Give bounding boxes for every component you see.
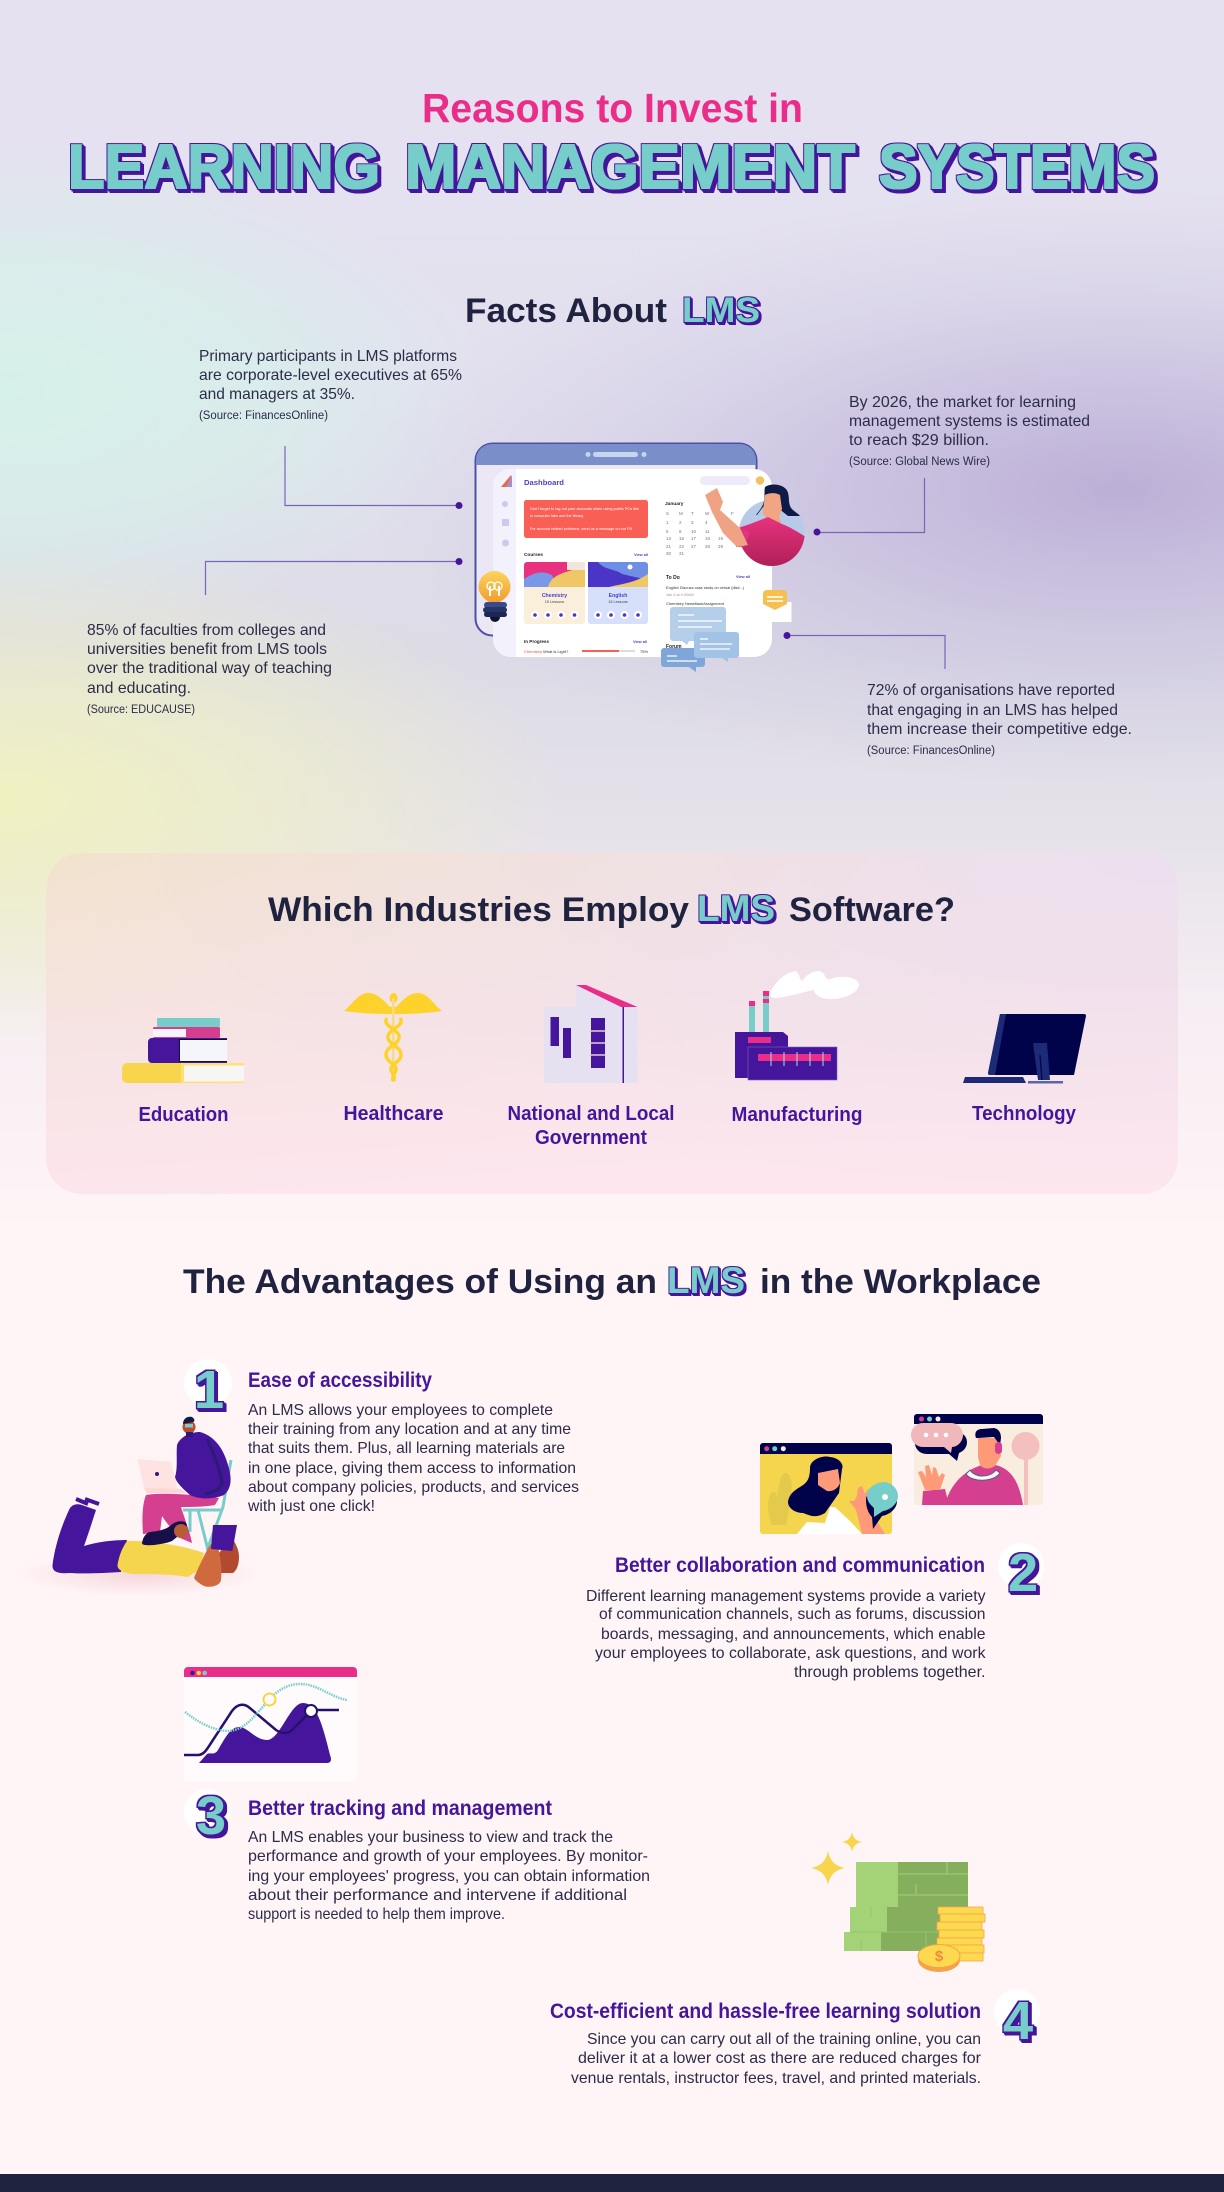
panel: industries xyxy=(46,853,1178,1194)
fact: faculties: over the traditional way of teaching xyxy=(87,660,332,677)
illustration: money and coins xyxy=(811,1832,985,1972)
dashboard card: 16 xyxy=(679,536,685,541)
number badge 1 xyxy=(184,1359,232,1420)
illustration: video call windows xyxy=(760,1414,1043,1534)
course card: english xyxy=(588,562,648,624)
item text: support is needed to help them improve. xyxy=(248,1906,505,1923)
item text xyxy=(586,1588,986,1681)
item text: venue rentals, instructor fees, travel, and printed materials. xyxy=(571,2070,981,2087)
main title: SYSTEMS xyxy=(879,133,1155,202)
dashboard card: 19 xyxy=(718,536,724,541)
connector lines xyxy=(206,446,945,669)
course card: chemistry: Chemistry xyxy=(542,593,567,599)
dashboard card: 22 xyxy=(679,544,685,549)
label: government: Government xyxy=(535,1127,647,1149)
heading: facts about LMS: LMS xyxy=(682,291,760,330)
icon: computer xyxy=(963,1014,1086,1084)
dashboard card: F xyxy=(731,511,734,516)
alert box xyxy=(524,500,648,538)
fact: participants: Primary participants in LMS platforms xyxy=(199,348,457,365)
item title: Cost-efficient and hassle-free learning solution xyxy=(550,2000,981,2023)
dashboard card: View all xyxy=(633,639,647,644)
item text: ing your employees' progress, you can obtain information xyxy=(248,1868,650,1885)
course card: english: English xyxy=(609,593,627,599)
dashboard card xyxy=(493,469,772,657)
fact: participants: are corporate-level executives at 65% xyxy=(199,367,462,384)
icon: books xyxy=(122,1018,244,1083)
dashboard card: Forum xyxy=(666,644,682,650)
item 3: tracking xyxy=(184,1667,650,1923)
fact: faculties: (Source: EDUCAUSE) xyxy=(87,704,195,716)
heading: advantages: LMS xyxy=(667,1260,745,1301)
illustration: students with laptop and tablet xyxy=(19,1417,259,1596)
fact: competitive edge: them increase their competitive edge. xyxy=(867,721,1132,738)
heading: industries: Which Industries Employ xyxy=(268,891,689,929)
number badge 1: 1 xyxy=(194,1360,224,1420)
dashboard card: 3 xyxy=(691,520,694,525)
dashboard card: View all xyxy=(634,552,648,557)
number badge 2 xyxy=(998,1543,1044,1603)
dashboard card: 17 xyxy=(691,536,697,541)
fact: market size xyxy=(849,394,1090,468)
title xyxy=(68,85,1155,202)
course card: english: 15 Lessons xyxy=(608,600,628,604)
heading: advantages xyxy=(183,1260,1041,1301)
dashboard card: 21 xyxy=(666,544,672,549)
item text: An LMS allows your employees to complete xyxy=(248,1402,553,1419)
heading: advantages: in the Workplace xyxy=(760,1263,1041,1301)
item text: their training from any location and at any time xyxy=(248,1421,571,1438)
fact: competitive edge xyxy=(867,682,1132,757)
dashboard card: What is Light? xyxy=(543,649,569,654)
item text: through problems together. xyxy=(794,1664,986,1681)
fact: faculties: and educating. xyxy=(87,680,191,697)
dashboard card: Courses xyxy=(524,552,543,558)
dashboard card: 18 xyxy=(705,536,711,541)
dollar coin: $ xyxy=(935,1948,944,1965)
item text: deliver it at a lower cost as there are reduced charges for xyxy=(578,2050,982,2067)
dashboard card: 30 xyxy=(666,551,672,556)
dashboard card: T xyxy=(691,511,694,516)
item title: Better collaboration and communication xyxy=(615,1554,985,1577)
fact: competitive edge: 72% of organisations have reported xyxy=(867,682,1115,699)
dashboard card: 28 xyxy=(705,544,711,549)
main title: MANAGEMENT xyxy=(405,133,855,202)
fact: faculties: 85% of faculties from colleges and xyxy=(87,622,326,639)
calendar: January xyxy=(665,501,684,507)
item text: of communication channels, such as forums, discussion xyxy=(599,1606,986,1623)
fact: participants xyxy=(199,348,462,422)
fact: competitive edge: that engaging in an LMS has helped xyxy=(867,702,1118,719)
dashboard card: 11 xyxy=(705,529,710,534)
dashboard card: M xyxy=(679,511,683,516)
dashboard card: View all xyxy=(736,574,750,579)
dashboard card: Chemistry xyxy=(524,649,542,654)
dashboard card: in computer labs and the library. xyxy=(530,514,584,518)
heading: industries: LMS xyxy=(697,888,775,929)
item title: Ease of accessibility xyxy=(248,1369,432,1392)
number badge 4: 4 xyxy=(1003,1991,1033,2051)
dollar coin xyxy=(918,1944,960,1972)
dashboard card: Chemistry NewsflashAssignment xyxy=(666,602,725,606)
dashboard card: 5 xyxy=(666,529,669,534)
icon: factory xyxy=(735,971,859,1080)
item text: that suits them. Plus, all learning materials are xyxy=(248,1440,565,1457)
dashboard card: 31 xyxy=(679,551,685,556)
label: manufacturing: Manufacturing xyxy=(732,1104,862,1126)
item title: Better tracking and management xyxy=(248,1797,552,1820)
dashboard card: 27 xyxy=(691,544,697,549)
label: healthcare: Healthcare xyxy=(344,1103,444,1125)
woman waving xyxy=(705,485,806,572)
dashboard card: 29 xyxy=(718,544,724,549)
label: government: National and Local xyxy=(508,1103,674,1125)
icon: government building xyxy=(544,985,638,1083)
illustration: line chart window xyxy=(184,1667,357,1782)
fact: competitive edge: (Source: FinancesOnline) xyxy=(867,745,995,757)
item text: your employees to collaborate, ask questions, and work xyxy=(595,1645,986,1662)
tablet frame xyxy=(476,444,756,636)
stack of coins xyxy=(937,1907,985,1961)
sparkles xyxy=(811,1832,862,1885)
fact: participants: and managers at 35%. xyxy=(199,386,355,403)
dashboard card: 13 xyxy=(666,536,672,541)
dashboard card: To Do xyxy=(666,575,680,581)
label: education: Education xyxy=(138,1104,228,1126)
item text: Since you can carry out all of the training online, you can xyxy=(587,2031,981,2048)
dashboard card: 4 xyxy=(705,520,708,525)
fact: market size: (Source: Global News Wire) xyxy=(849,456,990,468)
label: technology: Technology xyxy=(972,1103,1077,1125)
item text xyxy=(571,2031,982,2087)
fact: faculties: universities benefit from LMS tools xyxy=(87,641,327,658)
dashboard card: Jan 4 at 9:30AM xyxy=(666,593,694,597)
main title: LEARNING xyxy=(68,133,380,202)
item text: An LMS enables your business to view and track the xyxy=(248,1829,613,1846)
dashboard card: 6 xyxy=(679,529,682,534)
heading: advantages: The Advantages of Using an xyxy=(183,1263,657,1301)
heading: facts about LMS: Facts About xyxy=(465,292,667,330)
dashboard card: English Discuss case study on virtual (disti...) xyxy=(666,586,745,590)
chat bubbles xyxy=(661,607,739,672)
item text xyxy=(248,1829,650,1923)
number badge 3 xyxy=(184,1786,230,1846)
dashboard card: 75% xyxy=(640,649,648,654)
light bulb xyxy=(478,571,510,622)
heading: industries xyxy=(268,888,955,929)
dashboard card: For account related problems, send us a message on our FB xyxy=(530,527,632,531)
fact: faculties xyxy=(87,622,332,716)
item 1: ease of accessibility xyxy=(19,1359,579,1596)
dashboard card: 1 xyxy=(666,520,669,525)
fact: market size: By 2026, the market for learning xyxy=(849,394,1076,411)
subtitle: Reasons to Invest in xyxy=(422,85,803,131)
item text xyxy=(247,1402,579,1515)
item 4: cost efficient xyxy=(550,1832,1040,2087)
course card: chemistry: 15 Lessons xyxy=(545,600,564,604)
dashboard card: Don't forget to log out your accounts when using public PCs like xyxy=(530,507,639,511)
item text: about company policies, products, and services xyxy=(248,1479,579,1496)
main title xyxy=(68,133,1155,202)
dashboard card: W xyxy=(705,511,710,516)
label: government xyxy=(508,1103,674,1149)
fact: participants: (Source: FinancesOnline) xyxy=(199,410,328,422)
item text: with just one click! xyxy=(247,1498,375,1515)
dashboard card: 2 xyxy=(679,520,682,525)
item text: performance and growth of your employees. By monitor- xyxy=(248,1848,648,1865)
fact: market size: to reach $29 billion. xyxy=(849,432,989,449)
number badge 4 xyxy=(994,1989,1040,2051)
heading: facts about LMS xyxy=(465,291,760,330)
dashboard illustration xyxy=(476,444,806,672)
item 2: collaboration xyxy=(586,1414,1044,1681)
course card: chemistry xyxy=(524,562,585,624)
icon: caduceus xyxy=(344,993,442,1082)
window: woman waving xyxy=(760,1443,898,1534)
number badge 3: 3 xyxy=(196,1786,226,1846)
stacks of cash xyxy=(844,1862,968,1951)
dashboard card: S xyxy=(666,511,669,516)
heading: industries: Software? xyxy=(789,891,955,929)
item text: Different learning management systems provide a variety xyxy=(586,1588,986,1605)
dashboard card: 10 xyxy=(691,529,697,534)
dashboard card: In Progress xyxy=(524,639,549,645)
number badge 2: 2 xyxy=(1008,1543,1038,1603)
item text: about their performance and intervene if additional xyxy=(248,1887,627,1904)
envelope xyxy=(758,590,792,622)
item text: in one place, giving them access to information xyxy=(248,1460,576,1477)
fact: market size: management systems is estimated xyxy=(849,413,1090,430)
dashboard card: Dashboard xyxy=(524,478,564,487)
item text: boards, messaging, and announcements, which enable xyxy=(601,1626,986,1643)
footer bar xyxy=(0,2174,1224,2192)
window: man with headphones xyxy=(911,1414,1043,1505)
